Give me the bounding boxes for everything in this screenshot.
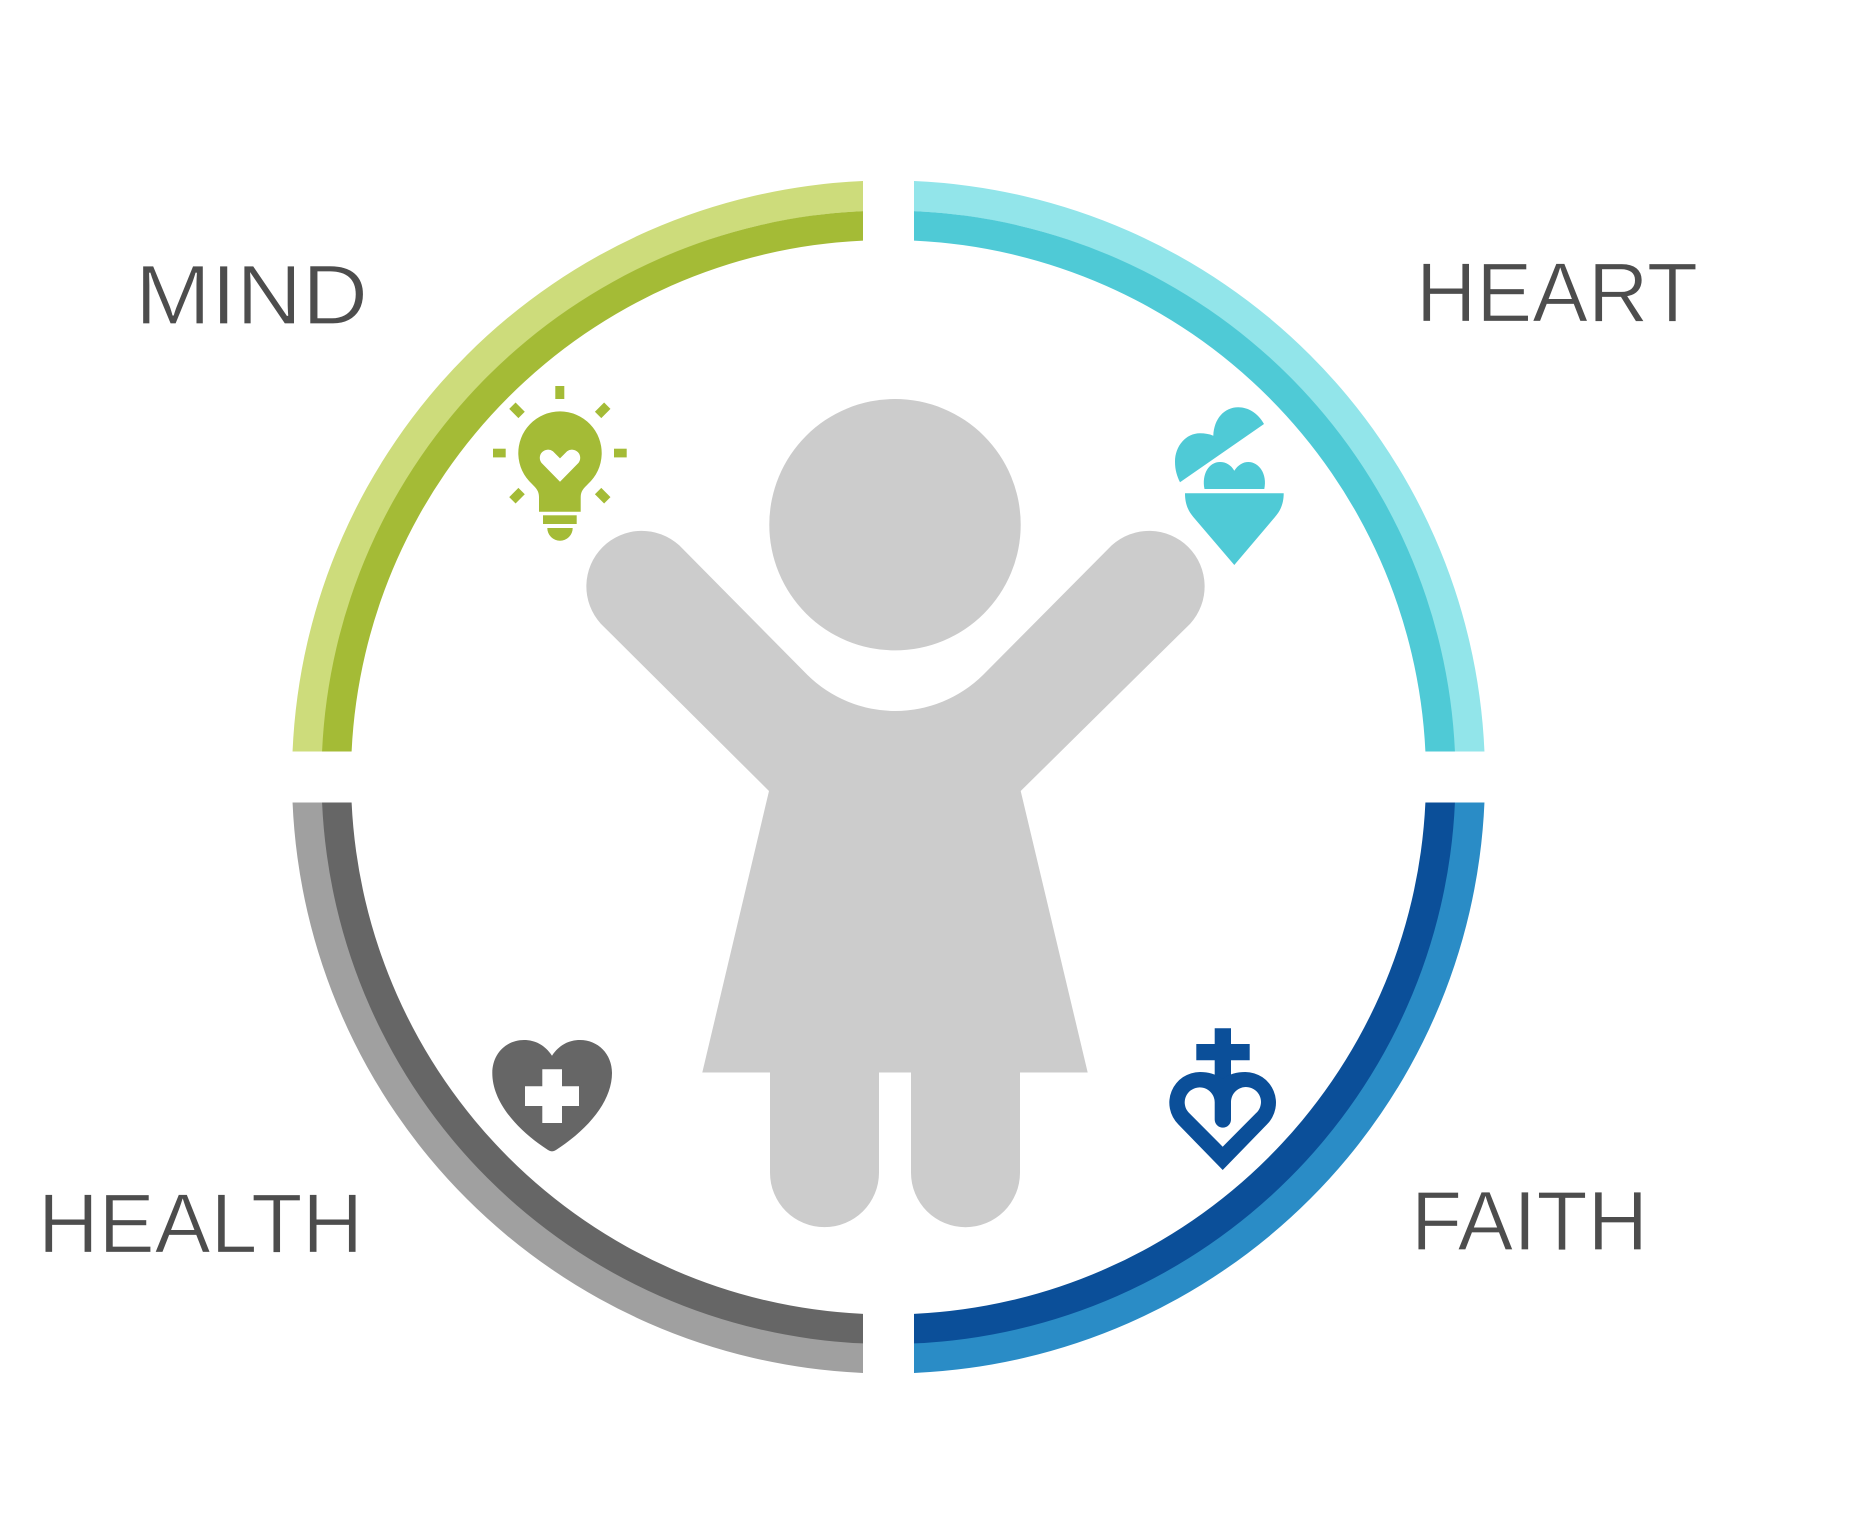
icon: broken heart in teal [1175, 407, 1284, 565]
label: HEALTH: HEALTH [38, 1177, 363, 1271]
central figure: person with raised arms [586, 399, 1205, 1227]
label: MIND: MIND [135, 248, 368, 342]
label: HEART: HEART [1416, 246, 1698, 340]
icon: heart with medical cross [492, 1040, 612, 1151]
label: FAITH: FAITH [1411, 1174, 1648, 1268]
ring segment: faith (bottom right) [914, 802, 1484, 1373]
ring segment: heart (top right) [914, 181, 1484, 752]
ring segment: health (bottom left) [293, 802, 863, 1373]
icon: heart with christian cross [1169, 1028, 1276, 1170]
ring segment: mind (top left) [293, 181, 863, 752]
icon: light bulb with heart [493, 386, 627, 541]
